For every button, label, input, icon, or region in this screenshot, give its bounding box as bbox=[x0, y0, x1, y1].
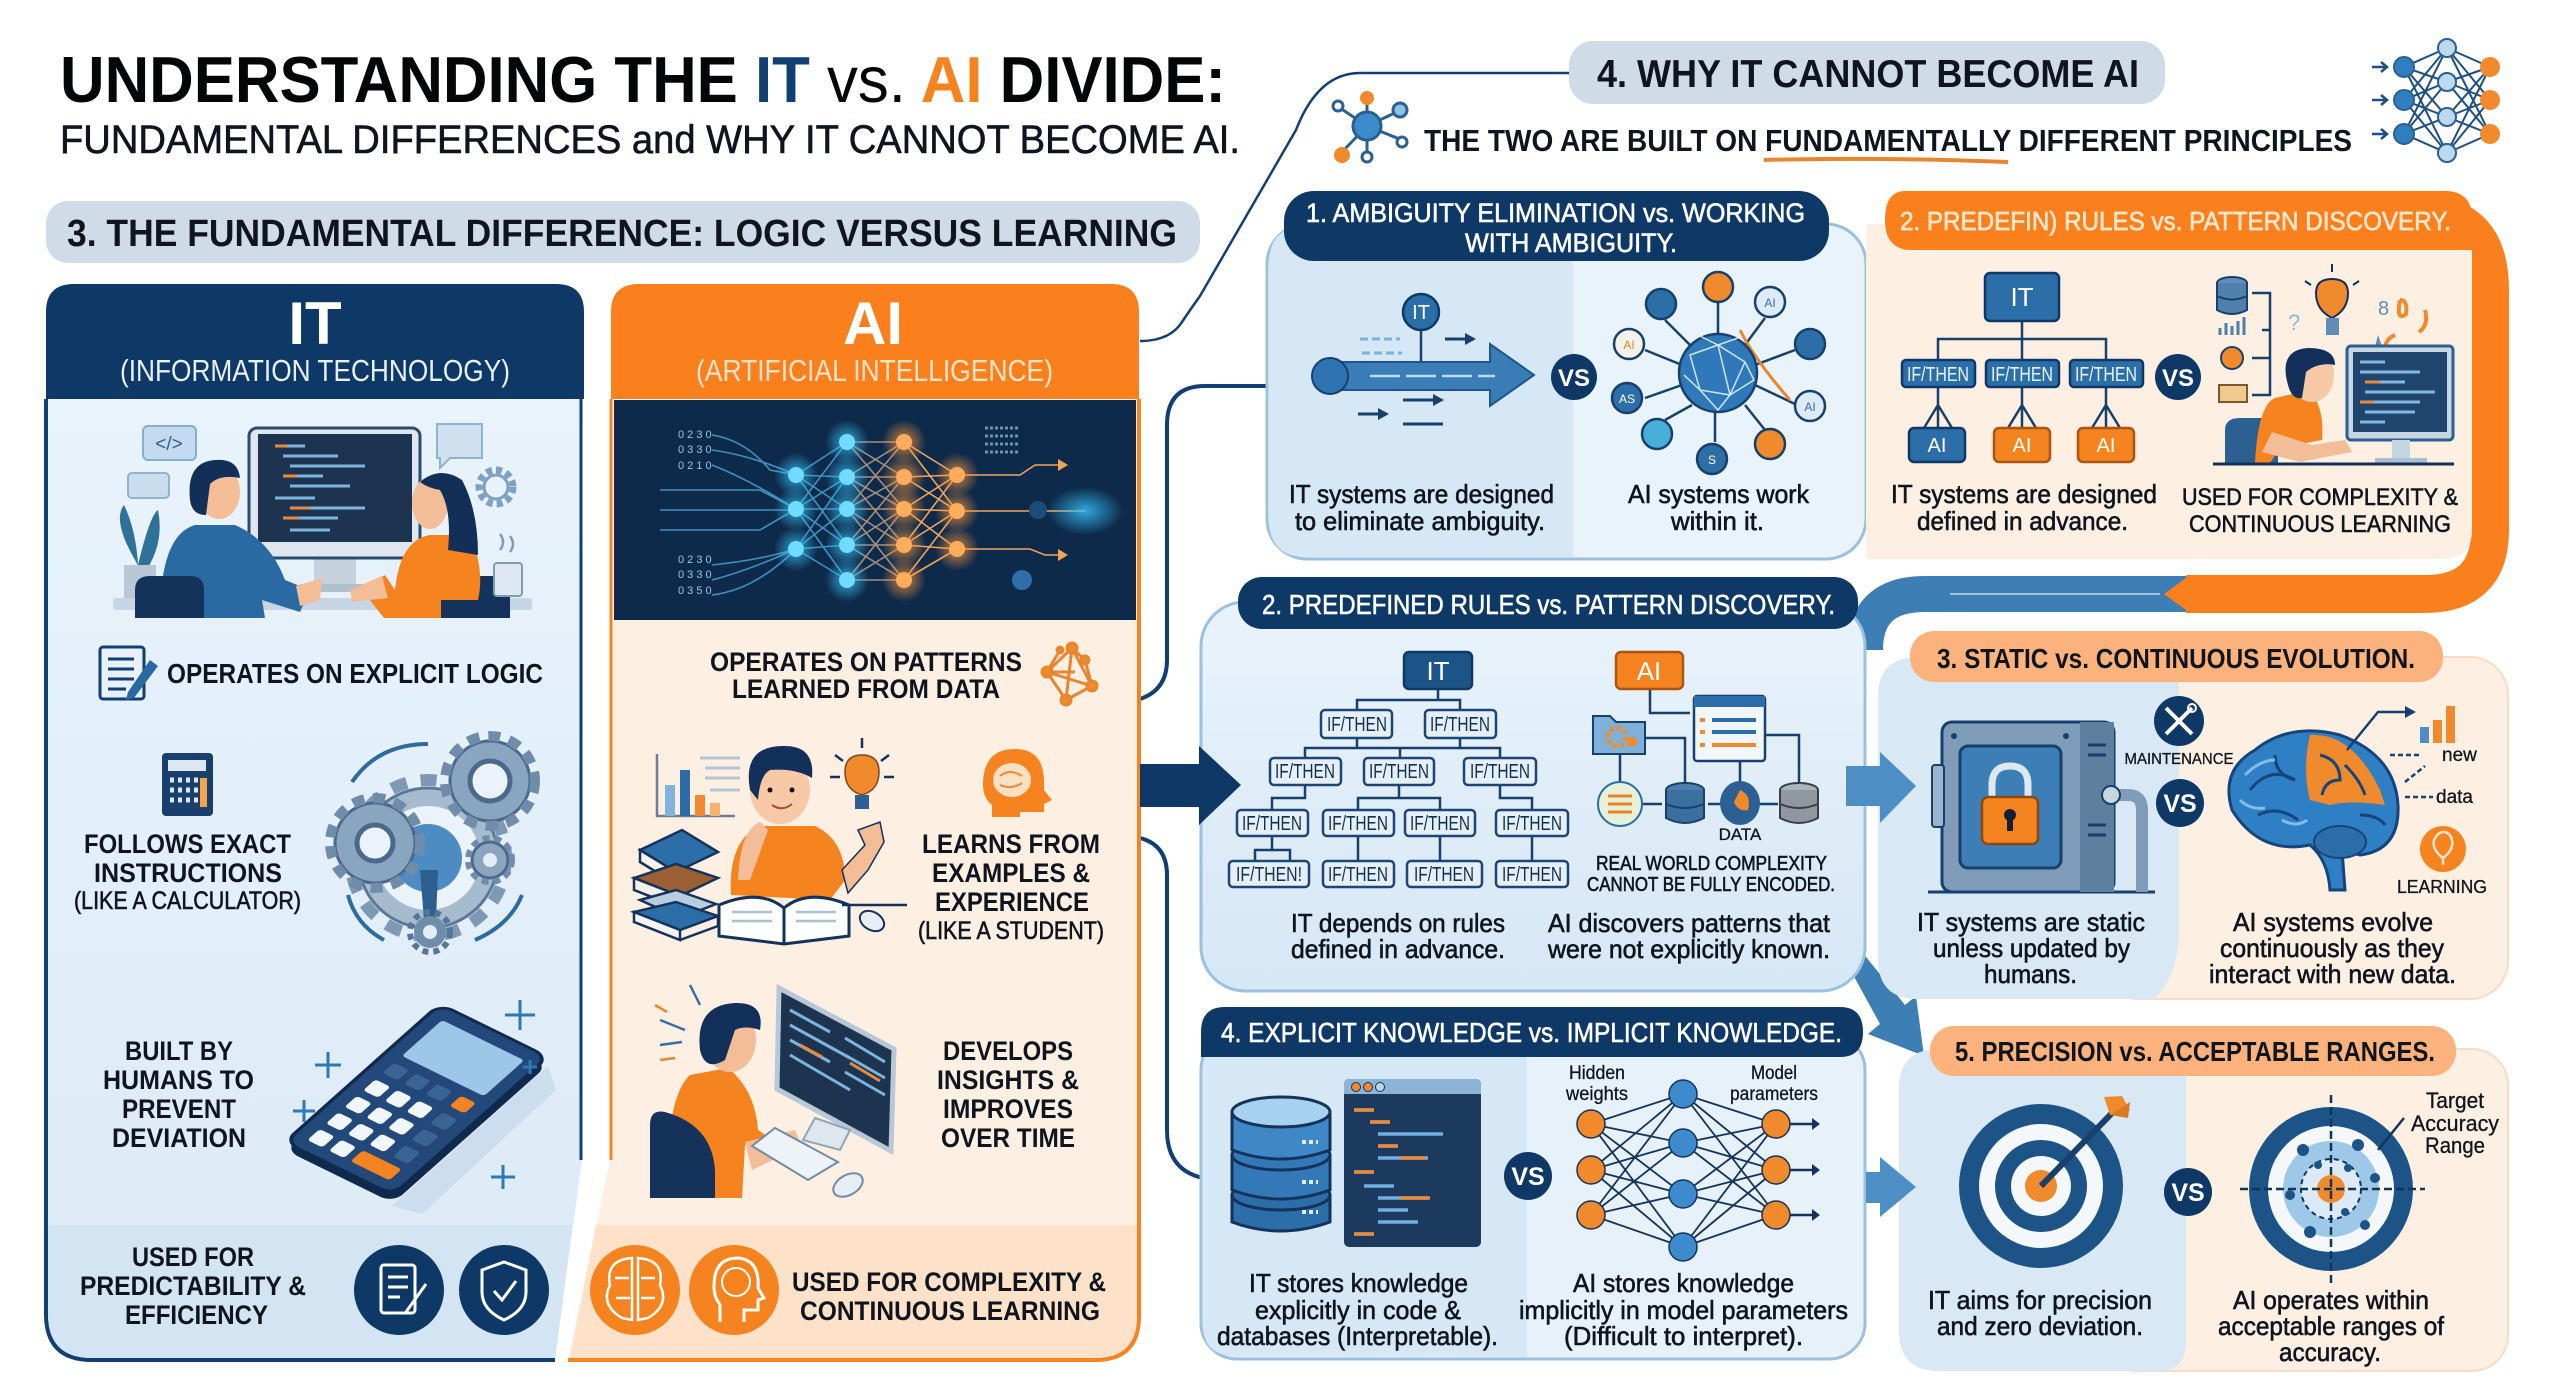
caption: AI: AI stores knowledge bbox=[1573, 1268, 1794, 1298]
caption: IT: and zero deviation. bbox=[1937, 1311, 2143, 1341]
VS badge bbox=[2156, 779, 2204, 827]
icon: orange head bbox=[983, 749, 1052, 817]
arrow: to precision panel bbox=[1866, 1157, 1916, 1217]
VS badge: VS bbox=[2162, 365, 2194, 392]
diagram: model network: parameters bbox=[1730, 1084, 1818, 1105]
connector: AI panel to panel 4 bbox=[1140, 838, 1203, 1178]
icon: shield circle bbox=[459, 1245, 549, 1335]
text: learns from examples bbox=[918, 829, 1104, 945]
diagram: IF/THEN tree: IF/THEN bbox=[1414, 864, 1474, 886]
VS badge bbox=[2155, 354, 2201, 400]
underline accent bbox=[1764, 159, 2008, 162]
illustration: locked safe bbox=[1928, 722, 2155, 892]
text: follows exact instructions: FOLLOWS EXACT bbox=[84, 829, 291, 859]
caption: AI bbox=[2218, 1285, 2445, 1367]
header pill bbox=[1284, 191, 1829, 261]
diagram: IF/THEN tree: IF/THEN bbox=[1328, 813, 1388, 835]
band: orange return arrow bbox=[2164, 214, 2490, 613]
diagram: globe network: AI bbox=[1804, 400, 1816, 414]
text: learns from examples: LEARNS FROM bbox=[922, 829, 1100, 859]
caption: IT bbox=[1891, 479, 2157, 536]
panel: IT bbox=[46, 284, 584, 1360]
VS badge: VS bbox=[2171, 1179, 2205, 1207]
illustration: acceptable range target: Accuracy bbox=[2411, 1111, 2499, 1136]
text: develops insights: DEVELOPS bbox=[943, 1036, 1073, 1066]
connector: AI panel to section 4 bbox=[1140, 73, 1575, 341]
icon: orange network bbox=[1042, 643, 1097, 705]
text: built on different principles: THE TWO ARE BUILT ON FUNDAMENTALLY DIFFERENT PRINCIPLES bbox=[1424, 123, 2352, 158]
illustration: developer at a monitor bbox=[650, 985, 894, 1202]
icon: maintenance wrench bbox=[2124, 696, 2234, 768]
diagram: globe network: AS bbox=[1619, 392, 1635, 406]
icon: head circle bbox=[689, 1245, 779, 1335]
caption: AI: AI operates within bbox=[2233, 1285, 2429, 1315]
illustration: acceptable range target bbox=[2240, 1088, 2499, 1285]
panel 2 (top): predefined rules bbox=[1866, 191, 2472, 559]
icon: small calculator bbox=[162, 753, 213, 816]
AI header bbox=[611, 284, 1139, 399]
illustration: neural network image: 0 3 3 0 bbox=[678, 569, 712, 581]
diagram: straight arrow: IT bbox=[1412, 302, 1430, 324]
callout: complexity: CANNOT BE FULLY ENCODED. bbox=[1587, 874, 1835, 896]
caption: IT: IT systems are designed bbox=[1891, 479, 2157, 509]
caption: IT bbox=[1289, 479, 1554, 536]
diagram: AI data flow bbox=[1593, 652, 1818, 844]
diagram: rule tree: IF/THEN bbox=[2075, 364, 2137, 386]
caption: IT bbox=[1291, 908, 1505, 964]
diagram: IF/THEN tree: IF/THEN bbox=[1328, 864, 1388, 886]
diagram: rule tree: IT bbox=[2010, 282, 2034, 312]
text: built by humans bbox=[103, 1036, 254, 1153]
icon: maintenance wrench: MAINTENANCE bbox=[2124, 751, 2234, 768]
text: learns from examples: EXPERIENCE bbox=[935, 887, 1089, 917]
diagram: globe network: AI bbox=[1623, 338, 1635, 352]
VS badge bbox=[1504, 1152, 1552, 1200]
header pill: 2. PREDEFINED RULES vs. PATTERN DISCOVERY. bbox=[1262, 589, 1835, 620]
diagram: globe network bbox=[1612, 272, 1825, 474]
text: develops insights: IMPROVES bbox=[943, 1094, 1073, 1124]
text: learns from examples: (LIKE A STUDENT) bbox=[918, 917, 1104, 945]
diagram: AI data flow: DATA bbox=[1719, 825, 1762, 844]
panel 4: explicit vs implicit bbox=[1201, 1007, 1865, 1359]
caption: IT bbox=[1917, 907, 2145, 989]
connector: AI panel to panel 1 bbox=[1140, 386, 1272, 699]
VS badge: VS bbox=[1511, 1163, 1545, 1191]
diagram: globe network: S bbox=[1708, 453, 1716, 467]
diagram: rule tree: IF/THEN bbox=[1991, 364, 2053, 386]
header pill bbox=[1238, 577, 1858, 629]
header pill: 4. EXPLICIT KNOWLEDGE vs. IMPLICIT KNOWLEDGE. bbox=[1221, 1017, 1842, 1048]
illustration: neural network image: 0 2 3 0 bbox=[678, 554, 712, 566]
diagram: IF/THEN tree: IT bbox=[1426, 656, 1450, 686]
illustration: two programmers at a computer: </> bbox=[155, 434, 183, 455]
caption: AI: were not explicitly known. bbox=[1547, 934, 1830, 964]
caption: IT: IT depends on rules bbox=[1291, 908, 1505, 938]
diagram: straight arrow bbox=[1312, 294, 1534, 424]
diagram: IF/THEN tree: IF/THEN bbox=[1410, 813, 1470, 835]
icon: document circle bbox=[354, 1245, 444, 1335]
panel 1: ambiguity bbox=[1267, 191, 1866, 559]
diagram: IF/THEN tree bbox=[1229, 652, 1568, 887]
text: follows exact instructions: (LIKE A CALCULATOR) bbox=[74, 887, 301, 915]
header pill: 5. PRECISION vs. ACCEPTABLE RANGES. bbox=[1955, 1036, 2435, 1067]
text: built by humans: BUILT BY bbox=[125, 1036, 233, 1066]
caption: AI: AI discovers patterns that bbox=[1548, 908, 1831, 938]
illustration: bullseye target bbox=[1959, 1096, 2130, 1268]
text: patterns learned: OPERATES ON PATTERNS bbox=[710, 647, 1022, 677]
illustration: person with data icons: 8 bbox=[2378, 298, 2389, 320]
header pill bbox=[1910, 631, 2443, 682]
caption: AI: interact with new data. bbox=[2209, 959, 2456, 989]
IT header bbox=[46, 284, 584, 399]
caption: IT: humans. bbox=[1984, 959, 2077, 989]
text: explicit logic: OPERATES ON EXPLICIT LOGIC bbox=[167, 658, 543, 689]
diagram: model network: weights bbox=[1565, 1084, 1628, 1105]
section 3 heading bbox=[46, 201, 1200, 263]
caption: AI: AI systems work bbox=[1628, 479, 1810, 509]
IT header: IT bbox=[288, 290, 342, 357]
diagram: IF/THEN tree: IF/THEN bbox=[1327, 714, 1387, 736]
text: patterns learned bbox=[710, 647, 1022, 704]
diagram: model network bbox=[1565, 1063, 1820, 1261]
caption: AI bbox=[1628, 479, 1810, 536]
caption: AI bbox=[2209, 907, 2456, 989]
band: blue return flow bbox=[1865, 594, 2200, 650]
caption: AI bbox=[2182, 484, 2458, 538]
caption: IT bbox=[1217, 1268, 1498, 1351]
band: complexity: CONTINUOUS LEARNING bbox=[800, 1296, 1100, 1326]
band: predictability: USED FOR bbox=[132, 1242, 254, 1272]
panel 5: precision bbox=[1899, 1026, 2508, 1371]
section 4 heading: 4. WHY IT CANNOT BECOME AI bbox=[1597, 53, 2139, 96]
diagram: IF/THEN tree: IF/THEN bbox=[1275, 761, 1335, 783]
VS badge bbox=[1551, 354, 1597, 400]
caption: AI: (Difficult to interpret). bbox=[1564, 1321, 1803, 1351]
caption: AI bbox=[1547, 908, 1831, 964]
illustration: calculator bbox=[285, 1000, 556, 1214]
caption: AI: within it. bbox=[1670, 506, 1764, 536]
caption: IT: to eliminate ambiguity. bbox=[1295, 506, 1545, 536]
band: predictability bbox=[48, 1225, 572, 1358]
caption: AI: USED FOR COMPLEXITY & bbox=[2182, 484, 2458, 511]
caption: AI: continuously as they bbox=[2220, 933, 2444, 963]
diagram: AI data flow: AI bbox=[1637, 656, 1661, 686]
arrow: central navy bbox=[1140, 746, 1241, 825]
caption: AI: implicitly in model parameters bbox=[1519, 1295, 1848, 1325]
caption: AI: accuracy. bbox=[2279, 1337, 2381, 1367]
text: built by humans: DEVIATION bbox=[112, 1123, 246, 1153]
header pill bbox=[1930, 1026, 2456, 1076]
header pill bbox=[1885, 191, 2472, 250]
VS badge: VS bbox=[1558, 365, 1590, 392]
caption: IT: IT aims for precision bbox=[1928, 1285, 2152, 1315]
icon: molecule bbox=[1333, 91, 1407, 163]
diagram: IF/THEN tree: IF/THEN bbox=[1502, 813, 1562, 835]
diagram: rule tree: IF/THEN bbox=[1907, 364, 1969, 386]
diagram: rule tree: AI bbox=[2013, 435, 2031, 457]
text: develops insights bbox=[937, 1036, 1079, 1153]
diagram: globe network: AI bbox=[1764, 296, 1776, 310]
header pill: WITH AMBIGUITY. bbox=[1465, 228, 1677, 258]
band: complexity: USED FOR COMPLEXITY & bbox=[792, 1267, 1106, 1297]
illustration: brain: data bbox=[2436, 787, 2473, 808]
icon: document and pen bbox=[100, 647, 158, 700]
illustration: database and code bbox=[1232, 1079, 1481, 1247]
illustration: student with books bbox=[634, 738, 907, 944]
band: predictability: PREDICTABILITY & bbox=[80, 1271, 306, 1301]
caption: IT bbox=[1928, 1285, 2152, 1341]
IT header: (INFORMATION TECHNOLOGY) bbox=[120, 353, 510, 388]
caption: IT: defined in advance. bbox=[1291, 934, 1505, 964]
caption: IT: defined in advance. bbox=[1917, 506, 2128, 536]
header pill bbox=[1201, 1007, 1863, 1057]
diagram: IF/THEN tree: IF/THEN bbox=[1470, 761, 1530, 783]
illustration: neural network image: 0 3 3 0 bbox=[678, 444, 712, 456]
caption: IT: IT systems are static bbox=[1917, 907, 2145, 937]
diagram: IF/THEN tree: IF/THEN bbox=[1502, 864, 1562, 886]
text: patterns learned: LEARNED FROM DATA bbox=[732, 674, 1000, 704]
caption: IT: IT systems are designed bbox=[1289, 479, 1554, 509]
VS badge bbox=[2164, 1168, 2212, 1216]
caption: AI: acceptable ranges of bbox=[2218, 1311, 2445, 1341]
illustration: neural network image: 0 2 3 0 bbox=[678, 429, 712, 441]
panel 2 (middle): predefined rules bbox=[1201, 577, 1865, 991]
illustration: neural network image bbox=[614, 400, 1136, 620]
arrow: to static panel bbox=[1846, 752, 1916, 823]
caption: IT: explicitly in code & bbox=[1255, 1295, 1461, 1325]
illustration: gears bbox=[330, 736, 535, 952]
illustration: neural network image: 0 3 5 0 bbox=[678, 585, 712, 597]
text: built by humans: PREVENT bbox=[122, 1094, 236, 1124]
illustration: person with data icons bbox=[2213, 264, 2454, 464]
illustration: two programmers at a computer bbox=[113, 424, 532, 618]
header pill: 1. AMBIGUITY ELIMINATION vs. WORKING bbox=[1306, 198, 1805, 228]
text: learns from examples: EXAMPLES & bbox=[932, 858, 1090, 888]
AI header: (ARTIFICIAL INTELLIGENCE) bbox=[696, 353, 1053, 388]
section 4 heading bbox=[1569, 41, 2165, 104]
illustration: acceptable range target: Target bbox=[2426, 1088, 2484, 1113]
diagram: IF/THEN tree: IF/THEN bbox=[1369, 761, 1429, 783]
AI header: AI bbox=[843, 290, 903, 357]
text: develops insights: INSIGHTS & bbox=[937, 1065, 1079, 1095]
caption: AI bbox=[1519, 1268, 1848, 1351]
caption: AI: CONTINUOUS LEARNING bbox=[2189, 511, 2451, 538]
panel: AI bbox=[568, 284, 1139, 1360]
diagram: IF/THEN tree: IF/THEN bbox=[1430, 714, 1490, 736]
diagram: model network: Hidden bbox=[1569, 1063, 1625, 1084]
callout: complexity: REAL WORLD COMPLEXITY bbox=[1596, 853, 1827, 875]
callout: complexity bbox=[1587, 853, 1835, 896]
text: follows exact instructions: INSTRUCTIONS bbox=[94, 858, 282, 888]
caption: IT: databases (Interpretable). bbox=[1217, 1321, 1498, 1351]
illustration: acceptable range target: Range bbox=[2425, 1133, 2485, 1158]
header pill: 2. PREDEFIN) RULES vs. PATTERN DISCOVERY. bbox=[1900, 206, 2451, 236]
diagram: model network: Model bbox=[1751, 1063, 1797, 1084]
illustration: brain bbox=[2229, 706, 2487, 897]
band: complexity bbox=[570, 1225, 1137, 1358]
caption: IT: IT stores knowledge bbox=[1249, 1268, 1468, 1298]
diagram: IF/THEN tree: IF/THEN bbox=[1242, 813, 1302, 835]
illustration: neural network image: 0 2 1 0 bbox=[678, 460, 712, 472]
diagram: rule tree: AI bbox=[2097, 435, 2115, 457]
icon: brain circle bbox=[590, 1245, 680, 1335]
illustration: brain: new bbox=[2442, 745, 2477, 766]
subtitle: FUNDAMENTAL DIFFERENCES and WHY IT CANNOT BECOME AI. bbox=[60, 118, 1240, 162]
band: predictability: EFFICIENCY bbox=[125, 1300, 268, 1330]
caption: IT: unless updated by bbox=[1933, 933, 2130, 963]
illustration: person with data icons: ? bbox=[2288, 310, 2300, 335]
panel 3: static vs evolution bbox=[1878, 631, 2508, 999]
VS badge: VS bbox=[2163, 790, 2197, 818]
caption: AI: AI systems evolve bbox=[2233, 907, 2433, 937]
icon: network bbox=[2372, 39, 2500, 162]
text: develops insights: OVER TIME bbox=[941, 1123, 1075, 1153]
header pill: 3. STATIC vs. CONTINUOUS EVOLUTION. bbox=[1937, 643, 2415, 674]
title: UNDERSTANDING THE IT vs. AI DIVIDE: bbox=[60, 43, 1226, 116]
text: follows exact instructions bbox=[74, 829, 301, 915]
section 3 heading: 3. THE FUNDAMENTAL DIFFERENCE: LOGIC VERSUS LEARNING bbox=[67, 213, 1177, 255]
diagram: IF/THEN tree: IF/THEN! bbox=[1236, 864, 1302, 886]
diagram: rule tree: AI bbox=[1928, 435, 1946, 457]
diagonal arrow bbox=[1846, 952, 1924, 1056]
text: built by humans: HUMANS TO bbox=[103, 1065, 254, 1095]
diagram: rule tree bbox=[1902, 273, 2143, 462]
illustration: brain: LEARNING bbox=[2397, 877, 2487, 897]
